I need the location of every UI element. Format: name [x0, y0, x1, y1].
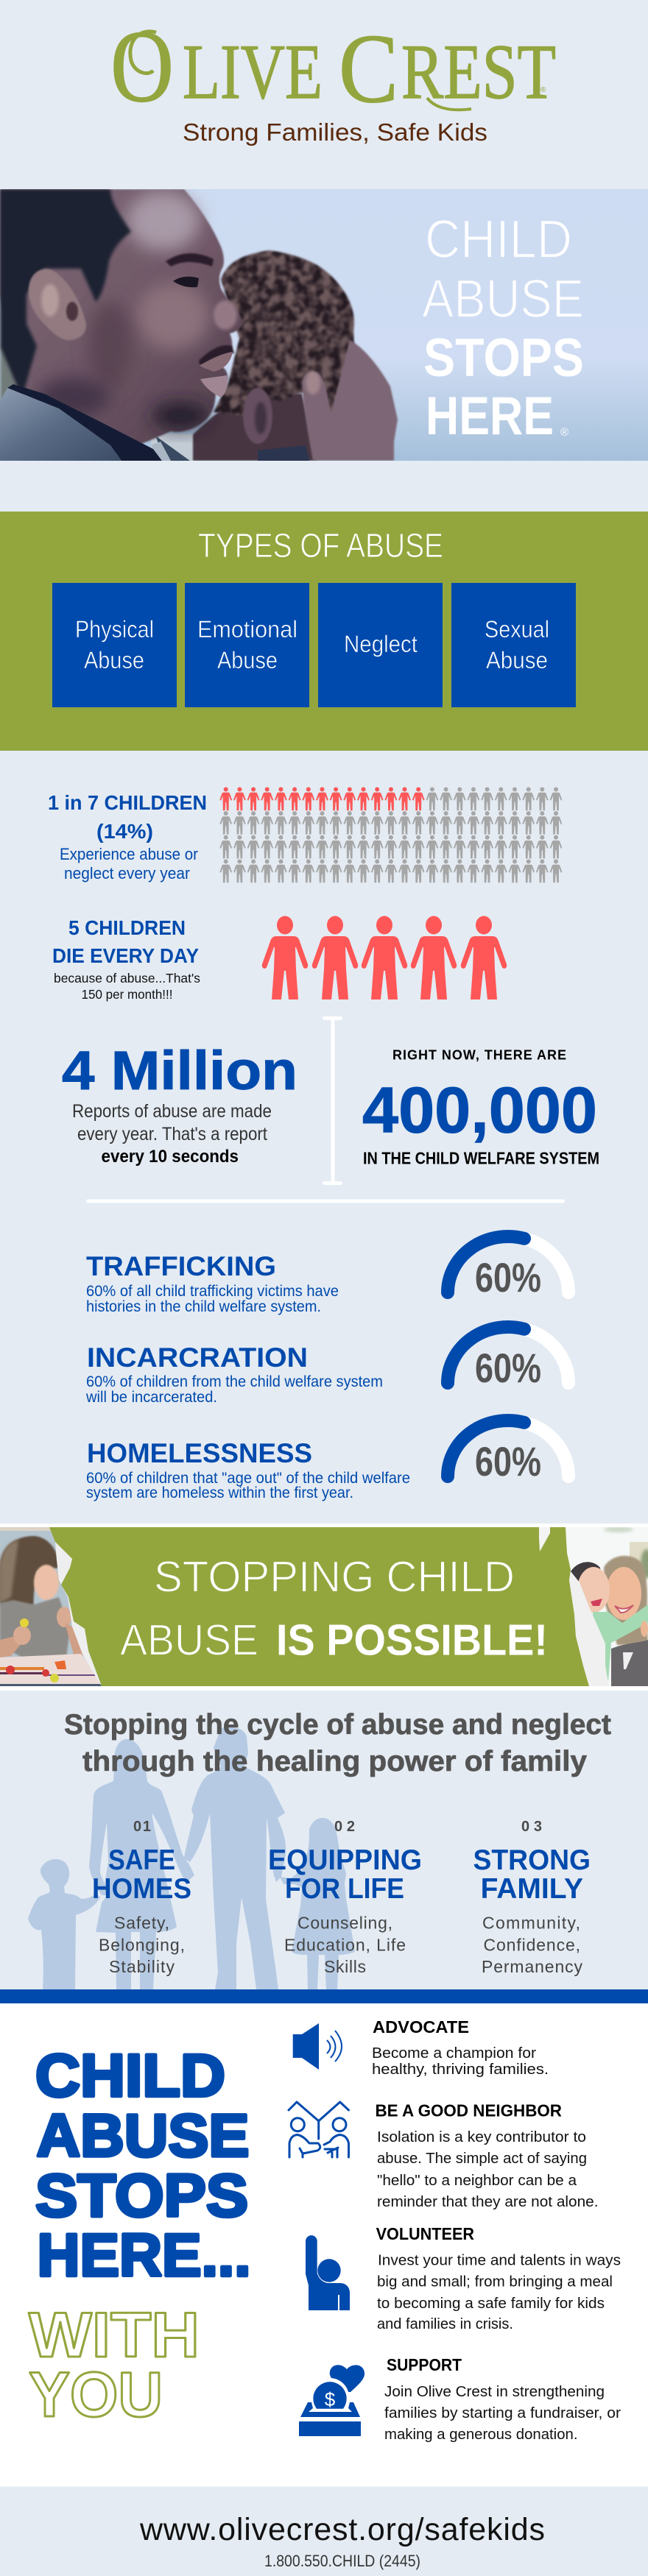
stat: 1 in 7 children: Experience abuse or [60, 845, 198, 863]
headline: with you: YOU [29, 2360, 163, 2430]
hero photo panel [0, 189, 648, 461]
text: be a good neighbor: "hello" to a neighbor can be a [377, 2173, 577, 2189]
banner headline: IS POSSIBLE! [276, 1616, 548, 1665]
card: emotional abuse [185, 583, 309, 707]
text: advocate [372, 2017, 549, 2078]
pillar 02: equipping for life: FOR LIFE [285, 1873, 404, 1905]
text: be a good neighbor: BE A GOOD NEIGHBOR [376, 2101, 562, 2120]
pillar 03: strong family: Community, [482, 1914, 580, 1933]
photo: mother and daughter [563, 1526, 648, 1686]
text: advocate: ADVOCATE [373, 2017, 469, 2037]
footer: website and phone: www.olivecrest.org/safekids [139, 2512, 545, 2547]
pillar 02: equipping for life [268, 1819, 422, 1976]
card: neglect: Neglect [344, 631, 418, 657]
text: volunteer: to becoming a safe family for kids [377, 2296, 605, 2312]
text: support: Join Olive Crest in strengthening [384, 2384, 605, 2400]
outcome: homelessness [86, 1438, 410, 1501]
footer: website and phone [139, 2512, 545, 2570]
panel: types of abuse [0, 512, 648, 751]
gauge: homelessness 60% [448, 1420, 568, 1485]
stat: 4 million reports: 4 Million [62, 1040, 297, 1101]
pillar 01: safe homes: Belonging, [99, 1936, 185, 1955]
text: be a good neighbor [376, 2101, 598, 2210]
outcome: incarceration [85, 1342, 383, 1406]
banner headline [120, 1553, 548, 1665]
stat: 5 children die every day: DIE EVERY DAY [52, 944, 199, 967]
pillar 03: strong family: STRONG [473, 1844, 591, 1876]
card: sexual abuse [451, 583, 576, 707]
text: volunteer: big and small; from bringing a meal [377, 2274, 613, 2290]
silhouette: family [28, 1727, 355, 1989]
photo: father and child [0, 189, 398, 461]
stat: 400,000 in the system: RIGHT NOW, THERE ARE [392, 1048, 566, 1063]
text: be a good neighbor: reminder that they are not alone. [377, 2194, 598, 2210]
hero headline: STOPS [423, 328, 584, 388]
stat: 1 in 7 children: (14%) [96, 820, 153, 843]
text: support [384, 2355, 621, 2443]
outcome: trafficking [86, 1251, 339, 1315]
headline: child abuse stops here [35, 2042, 250, 2289]
outcome: incarceration: will be incarcerated. [85, 1389, 217, 1406]
gauge: incarceration 60%: 60% [475, 1345, 541, 1391]
stat: 1 in 7 children: 1 in 7 CHILDREN [48, 791, 207, 814]
logo: Olive Crest: O [110, 10, 174, 124]
headline: child abuse stops here: CHILD [35, 2042, 225, 2109]
icon: raised hand [306, 2235, 350, 2310]
logo: Olive Crest: ® [540, 86, 546, 94]
text: volunteer: VOLUNTEER [376, 2224, 474, 2243]
stat: 5 children die every day [52, 916, 200, 1002]
logo: Olive Crest: C [339, 14, 398, 123]
headline: child abuse stops here: STOPS [35, 2162, 248, 2229]
pillar 02: equipping for life: Counseling, [297, 1914, 392, 1933]
pillar 03: strong family: FAMILY [481, 1873, 583, 1905]
card: emotional abuse: Abuse [217, 647, 278, 673]
pillar 02: equipping for life: EQUIPPING [268, 1844, 422, 1876]
hero headline: ® [560, 426, 568, 439]
stat: 5 children die every day: because of abuse...That's [54, 971, 200, 986]
text: support: making a generous donation. [384, 2427, 577, 2443]
hero headline [423, 220, 582, 436]
text: advocate: Become a champion for [372, 2045, 536, 2062]
pillar 03: strong family [473, 1819, 591, 1976]
card: physical abuse [52, 583, 177, 707]
outcome: incarceration: 60% of children from the child welfare system [86, 1373, 383, 1390]
stat: 4 million reports [62, 1040, 297, 1167]
text: volunteer: and families in crisis. [377, 2316, 513, 2332]
card: sexual abuse: Abuse [486, 647, 548, 673]
pillar 01: safe homes: SAFE [108, 1844, 175, 1876]
gauge: incarceration 60% [448, 1327, 568, 1391]
stat: 400,000 in the system: IN THE CHILD WELFARE SYSTEM [363, 1149, 599, 1168]
stat: 4 million reports: every 10 seconds [102, 1147, 239, 1167]
hero headline: ABUSE [422, 269, 584, 329]
stat: 5 children die every day: 5 CHILDREN [68, 916, 186, 939]
photo: girl playing [0, 1527, 107, 1686]
headline: child abuse stops here: HERE... [37, 2222, 250, 2289]
pictogram: five children [262, 916, 507, 999]
heading: stopping the cycle: through the healing power of family [82, 1746, 587, 1777]
logo: Olive Crest: REST [401, 29, 556, 115]
text: support: SUPPORT [387, 2355, 462, 2374]
stat: 400,000 in the system: 400,000 [362, 1074, 597, 1147]
blue divider bar [0, 1989, 648, 2003]
logo: Olive Crest: LIVE [183, 29, 323, 115]
hero headline: HERE [426, 386, 554, 446]
stat: 4 million reports: every year. That's a report [77, 1124, 267, 1144]
text: advocate: healthy, thriving families. [372, 2062, 549, 2078]
pillar 03: strong family: 03 [521, 1819, 542, 1835]
text: volunteer [376, 2224, 621, 2332]
pillar 01: safe homes [92, 1819, 191, 1976]
heading: stopping the cycle [64, 1709, 611, 1777]
card: physical abuse: Abuse [84, 647, 144, 673]
pillar 02: equipping for life: 02 [334, 1819, 355, 1835]
stat: 4 million reports: Reports of abuse are made [72, 1101, 272, 1122]
gauge: homelessness 60%: 60% [475, 1438, 541, 1485]
headline: with you [29, 2300, 200, 2430]
headline: child abuse stops here: ABUSE [37, 2103, 249, 2170]
pillar 02: equipping for life: Skills [324, 1957, 366, 1976]
banner headline: ABUSE [120, 1616, 258, 1665]
stat: 1 in 7 children: neglect every year [64, 864, 190, 882]
hero headline: CHILD [425, 210, 572, 269]
tagline: Strong Families, Safe Kids [183, 118, 487, 146]
heading: stopping the cycle: Stopping the cycle of abuse and neglect [64, 1709, 611, 1741]
text: volunteer: Invest your time and talents in ways [378, 2252, 621, 2268]
icon: donation box: $ [325, 2388, 336, 2410]
pillar 01: safe homes: Safety, [114, 1914, 169, 1933]
icon: megaphone speaker [293, 2023, 342, 2070]
card: physical abuse: Physical [75, 616, 154, 643]
gauge: trafficking 60% [448, 1236, 568, 1301]
divider [86, 1016, 565, 1203]
logo: Olive Crest [110, 10, 556, 124]
icon: donation box [299, 2365, 364, 2436]
outcome: incarceration: INCARCRATION [87, 1342, 308, 1373]
headline: with you: WITH [29, 2300, 200, 2371]
pictogram: 15 of 100 children [219, 788, 562, 882]
banner headline: STOPPING CHILD [154, 1553, 515, 1602]
card: neglect [318, 583, 443, 707]
stat: 1 in 7 children [48, 791, 207, 882]
pillar 01: safe homes: 01 [133, 1819, 151, 1835]
outcome: trafficking: TRAFFICKING [86, 1251, 276, 1281]
green torn banner [49, 1527, 589, 1686]
pillar 01: safe homes: HOMES [92, 1873, 191, 1905]
gauge: trafficking 60%: 60% [475, 1254, 541, 1301]
footer: website and phone: 1.800.550.CHILD (2445) [264, 2552, 420, 2570]
pillar 02: equipping for life: Education, Life [284, 1936, 406, 1955]
stat: 5 children die every day: 150 per month!!! [81, 987, 172, 1002]
card: emotional abuse: Emotional [197, 616, 297, 643]
stat: 400,000 in the system [362, 1048, 599, 1168]
pillar 03: strong family: Confidence, [483, 1936, 580, 1955]
icon: neighbors [289, 2102, 349, 2157]
pillar 01: safe homes: Stability [109, 1957, 175, 1976]
panel: call to action [0, 2003, 648, 2487]
text: support: families by starting a fundraiser, or [384, 2405, 621, 2421]
outcome: homelessness: 60% of children that "age out" of the child welfare [86, 1470, 410, 1487]
heading: types of abuse: TYPES OF ABUSE [198, 526, 443, 565]
outcome: homelessness: HOMELESSNESS [87, 1438, 312, 1468]
outcome: homelessness: system are homeless within the first year. [86, 1485, 353, 1501]
outcome: trafficking: 60% of all child trafficking victims have [86, 1283, 339, 1300]
card: sexual abuse: Sexual [485, 616, 549, 643]
outcome: trafficking: histories in the child welfare system. [86, 1298, 321, 1315]
text: be a good neighbor: abuse. The simple act of saying [377, 2151, 587, 2167]
pillar 03: strong family: Permanency [482, 1957, 583, 1976]
text: be a good neighbor: Isolation is a key contributor to [377, 2129, 586, 2145]
banner: stopping child abuse is possible [0, 1524, 648, 1691]
